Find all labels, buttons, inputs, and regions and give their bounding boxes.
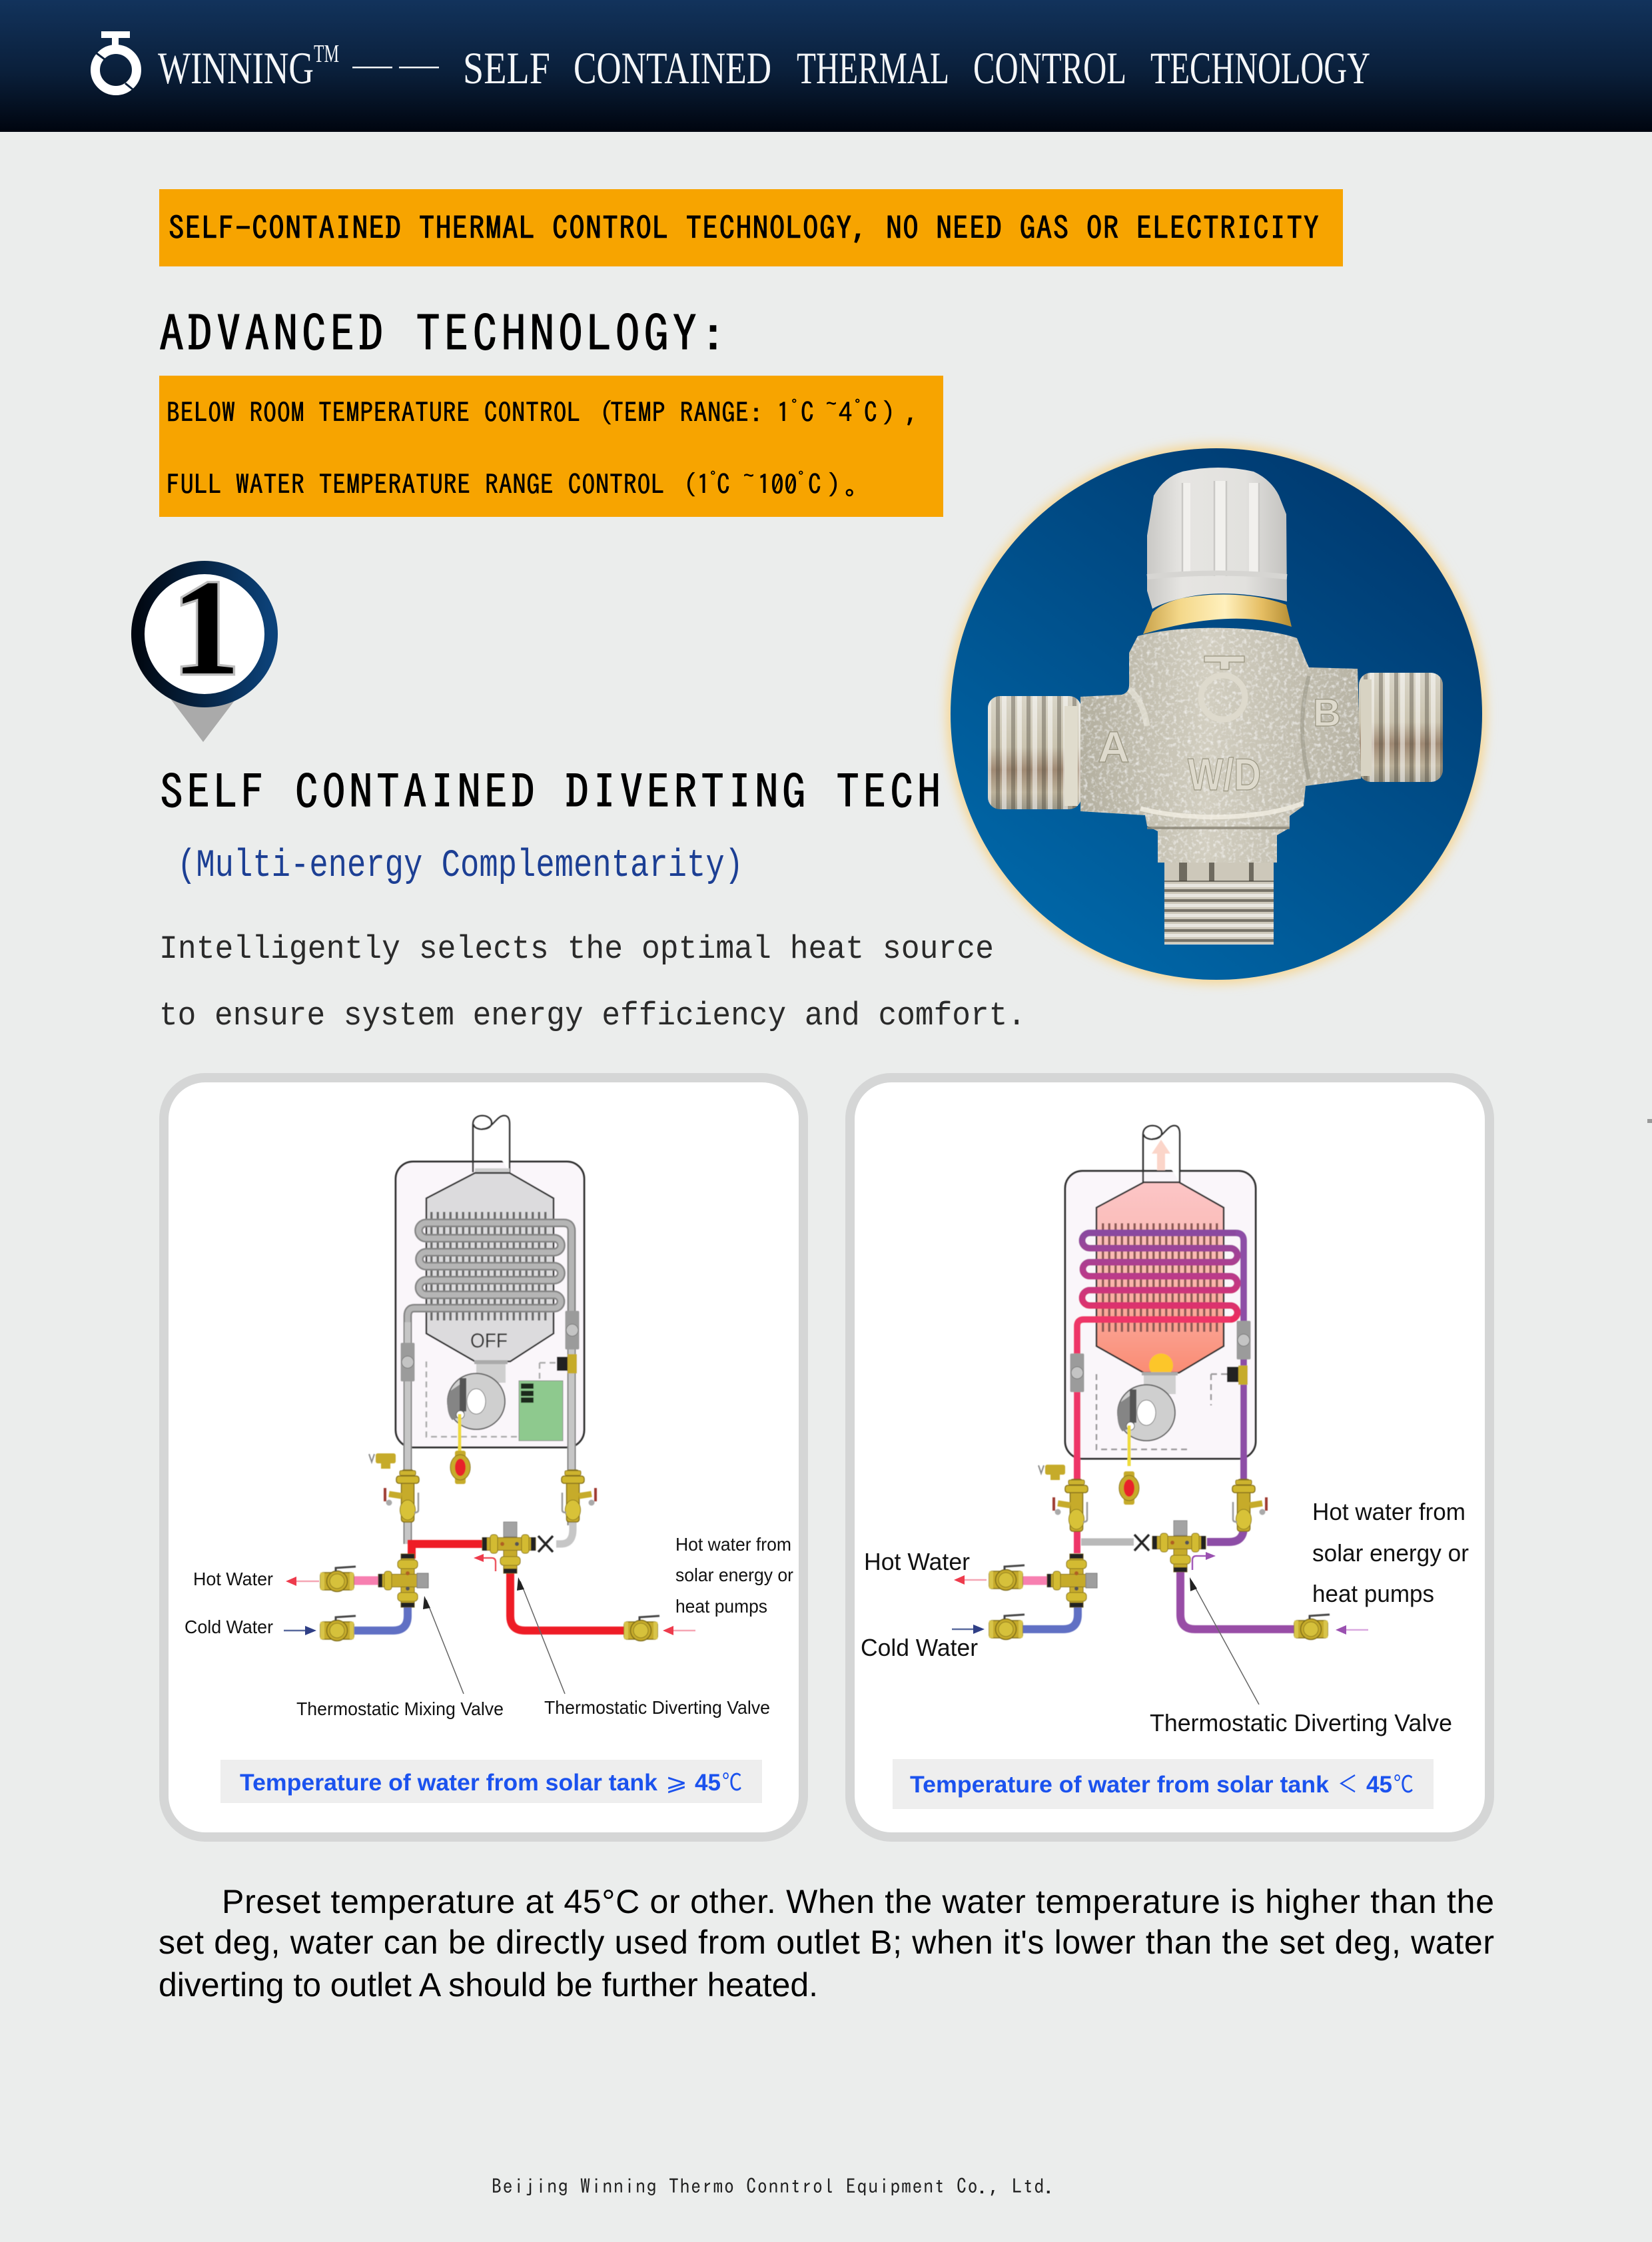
diagram labels: heat pumps bbox=[1312, 1580, 1434, 1607]
valve embossed markings bbox=[1098, 656, 1341, 800]
caption: temperature below 45 bbox=[893, 1759, 1434, 1809]
section description: Intelligently selects the optimal heat source bbox=[159, 931, 994, 968]
header title: TM bbox=[314, 40, 339, 68]
diagram labels bbox=[861, 1498, 1469, 1736]
header title: CONTROL bbox=[973, 43, 1126, 93]
tagline banner bbox=[159, 189, 1343, 266]
valve handle cap bbox=[1147, 468, 1287, 609]
caption: temperature at or above 45: 45 bbox=[695, 1770, 721, 1796]
diagram labels: Thermostatic Diverting Valve bbox=[1150, 1709, 1452, 1736]
pointer line bbox=[1190, 1577, 1259, 1704]
valve embossed markings: B bbox=[1313, 691, 1341, 735]
piping and valves bbox=[320, 1451, 659, 1641]
banner line 1: ） bbox=[882, 399, 909, 426]
valve embossed markings: W/D bbox=[1188, 749, 1261, 800]
header title bbox=[158, 40, 1370, 93]
caption: temperature below 45: Temperature of water from solar tank bbox=[910, 1772, 1330, 1798]
caption: temperature at or above 45: Temperature of water from solar tank bbox=[240, 1770, 658, 1796]
heading: advanced technology: ADVANCED TECHNOLOGY: bbox=[159, 308, 725, 358]
valve brass ring bbox=[1143, 595, 1292, 634]
number badge 1: 1 bbox=[172, 552, 240, 703]
explanatory paragraph: Preset temperature at 45°C or other. When the water temperature is higher than the bbox=[222, 1883, 1494, 1920]
banner line 1: 4 bbox=[839, 399, 852, 426]
diagram labels: Hot Water bbox=[864, 1548, 970, 1575]
banner line 2: 。 bbox=[845, 471, 871, 498]
diagram labels: Thermostatic Diverting Valve bbox=[544, 1697, 770, 1718]
diagram labels bbox=[185, 1534, 793, 1719]
header title: SELF bbox=[463, 43, 550, 93]
diagram labels: solar energy or bbox=[1312, 1539, 1469, 1567]
banner line 1: （ bbox=[586, 399, 613, 426]
diagram labels: Thermostatic Mixing Valve bbox=[296, 1698, 504, 1719]
explanatory paragraph: set deg, water can be directly used from outlet B; when it's lower than the set deg, water bbox=[159, 1924, 1494, 1961]
banner line 2: ~ bbox=[742, 471, 755, 498]
caption: temperature below 45: 45 bbox=[1366, 1772, 1392, 1798]
banner line 1: ° bbox=[791, 398, 809, 416]
pointer lines bbox=[423, 1577, 565, 1694]
banner line 2: C bbox=[808, 471, 821, 498]
banner line 2: C bbox=[717, 471, 730, 498]
valve bottom thread bbox=[1164, 859, 1274, 944]
banner line 2: （ bbox=[670, 471, 697, 498]
valve body shading bbox=[1129, 676, 1309, 828]
banner line 1: 1 bbox=[777, 399, 790, 426]
banner line 1: TEMP RANGE: bbox=[610, 399, 763, 426]
banner line 1: ° bbox=[855, 398, 872, 416]
header title: WINNING bbox=[158, 43, 314, 93]
section description: to ensure system energy efficiency and comfort. bbox=[159, 997, 1026, 1034]
valve right thread bbox=[1359, 673, 1443, 782]
diagram labels: Cold Water bbox=[185, 1617, 273, 1637]
caption: temperature at or above 45: ⩾ bbox=[665, 1764, 687, 1798]
explanatory paragraph: diverting to outlet A should be further heated. bbox=[159, 1966, 818, 2004]
flow arrows bbox=[284, 1554, 695, 1635]
tagline banner: SELF-CONTAINED THERMAL CONTROL TECHNOLOGY, NO NEED GAS OR ELECTRICITY bbox=[169, 212, 1319, 243]
caption: temperature below 45: ＜ bbox=[1338, 1766, 1358, 1800]
water heater schematic, burning bbox=[1065, 1126, 1256, 1553]
footer company name: Beijing Winning Thermo Conntrol Equipment Co., Ltd. bbox=[492, 2176, 1055, 2196]
banner line 2: ° bbox=[798, 470, 815, 488]
banner line 1: , bbox=[906, 399, 919, 426]
section heading: SELF CONTAINED DIVERTING TECH bbox=[160, 768, 941, 815]
piping and valves bbox=[989, 1465, 1330, 1640]
banner line 2: ° bbox=[710, 470, 727, 488]
banner line 1: C bbox=[801, 399, 814, 426]
section subtitle: (Multi-energy Complementarity) bbox=[177, 845, 743, 888]
header banner bbox=[0, 0, 1652, 132]
header title: TECHNOLOGY bbox=[1150, 43, 1370, 93]
water heater schematic, off: OFF bbox=[470, 1329, 508, 1352]
number badge 1 bbox=[138, 552, 271, 742]
banner line 2: 1 bbox=[697, 471, 710, 498]
banner line 1: C bbox=[864, 399, 877, 426]
caption: temperature at or above 45: ℃ bbox=[722, 1764, 742, 1798]
advanced technology banner bbox=[159, 376, 943, 517]
section description bbox=[159, 931, 1026, 1034]
diagram labels: Hot Water bbox=[193, 1569, 273, 1589]
banner line 2: 100 bbox=[757, 471, 797, 498]
panel: right diagram, solar water not hot enough bbox=[850, 1078, 1489, 1837]
banner line 1: ~ bbox=[825, 399, 838, 426]
banner line 2: ） bbox=[827, 471, 854, 498]
product photo: thermostatic valve bbox=[947, 444, 1486, 984]
diagram labels: Hot water from bbox=[675, 1534, 791, 1555]
caption: temperature at or above 45 bbox=[220, 1760, 762, 1803]
diagram labels: Hot water from bbox=[1312, 1498, 1465, 1525]
panel: left diagram, solar water hot enough bbox=[164, 1078, 803, 1837]
valve body bbox=[1080, 628, 1361, 863]
water heater schematic, off bbox=[396, 1116, 584, 1544]
caption: temperature below 45: ℃ bbox=[1394, 1766, 1414, 1800]
flow arrows bbox=[952, 1552, 1368, 1635]
explanatory paragraph bbox=[159, 1883, 1494, 2004]
diagram labels: heat pumps bbox=[675, 1596, 767, 1617]
valve left thread bbox=[988, 696, 1081, 809]
valve embossed markings: A bbox=[1098, 722, 1130, 771]
icon: company logo bbox=[95, 31, 137, 91]
header title: THERMAL bbox=[797, 43, 949, 93]
banner line 2: FULL WATER TEMPERATURE RANGE CONTROL bbox=[167, 471, 665, 498]
header title: CONTAINED bbox=[574, 43, 771, 93]
diagram labels: Cold Water bbox=[861, 1634, 978, 1661]
diagram labels: solar energy or bbox=[675, 1565, 793, 1585]
banner line 1: BELOW ROOM TEMPERATURE CONTROL bbox=[167, 399, 581, 426]
